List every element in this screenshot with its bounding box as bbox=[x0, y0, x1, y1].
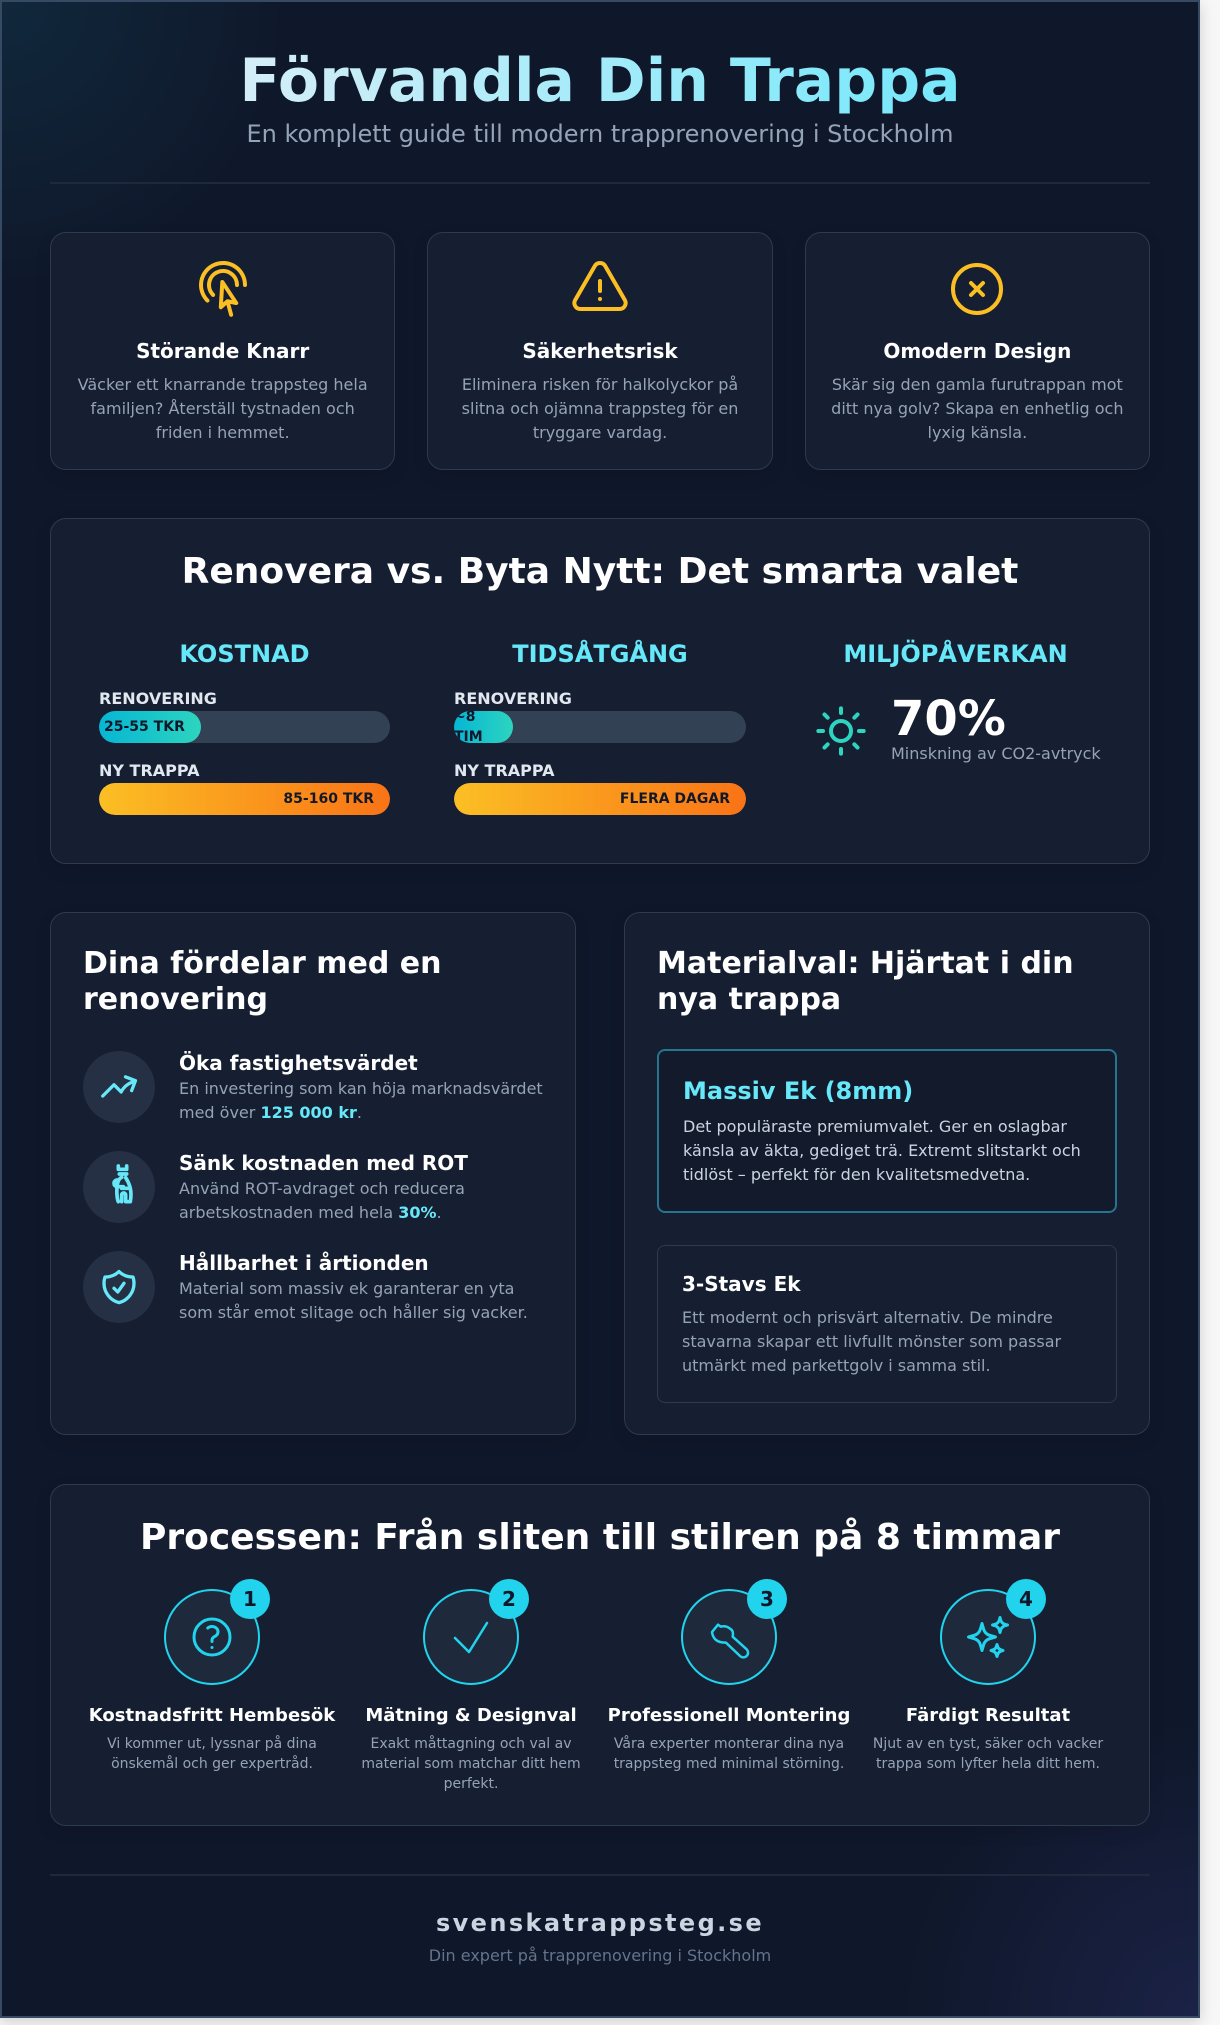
step heading: Färdigt Resultat bbox=[906, 1705, 1070, 1726]
material text: Det populäraste premiumvalet. Ger en oslagbar bbox=[683, 1117, 1067, 1136]
bar: renovation cost: 25-55 TKR bbox=[104, 719, 185, 735]
step text bbox=[107, 1735, 317, 1772]
heading: Dina fördelar med en bbox=[83, 946, 442, 981]
icon: rot deduction bbox=[83, 1151, 155, 1223]
benefit heading: Öka fastighetsvärdet bbox=[179, 1051, 418, 1075]
step text bbox=[361, 1735, 581, 1792]
heading: Omodern Design bbox=[883, 339, 1071, 363]
step text: Njut av en tyst, säker och vacker bbox=[873, 1736, 1103, 1752]
subtitle: En komplett guide till modern trapprenovering i Stockholm bbox=[246, 120, 954, 148]
benefit heading: Hållbarhet i årtionden bbox=[179, 1251, 429, 1275]
material text bbox=[682, 1308, 1062, 1375]
benefit text: En investering som kan höja marknadsvärdet bbox=[179, 1079, 543, 1098]
step number: 4 bbox=[1019, 1587, 1033, 1611]
step icon: question bbox=[164, 1589, 260, 1685]
icon: trending up bbox=[83, 1051, 155, 1123]
header bbox=[50, 46, 1150, 184]
bar: new stairs cost: 85-160 TKR bbox=[283, 791, 374, 807]
body text bbox=[831, 375, 1124, 442]
step 4 bbox=[873, 1579, 1104, 1772]
step number bbox=[747, 1579, 787, 1619]
label: NY TRAPPA bbox=[99, 760, 200, 780]
icon: sun bbox=[816, 706, 866, 756]
step number bbox=[230, 1579, 270, 1619]
footer bbox=[50, 1874, 1150, 1965]
step text: perfekt. bbox=[444, 1776, 498, 1792]
step 3 bbox=[608, 1579, 850, 1772]
material: massive oak bbox=[657, 1049, 1117, 1213]
body text: familjen? Återställ tystnaden och bbox=[91, 399, 355, 418]
bar: new stairs cost bbox=[99, 783, 390, 815]
label: RENOVERING bbox=[454, 688, 572, 708]
benefit text: som står emot slitage och håller sig vacker. bbox=[179, 1303, 528, 1322]
step number bbox=[1006, 1579, 1046, 1619]
body text: slitna och ojämna trappsteg för en bbox=[462, 399, 738, 418]
material text: Ett modernt och prisvärt alternativ. De mindre bbox=[682, 1308, 1053, 1327]
step heading: Kostnadsfritt Hembesök bbox=[89, 1705, 335, 1726]
step text bbox=[614, 1735, 844, 1772]
material text bbox=[683, 1117, 1081, 1184]
benefit text bbox=[179, 1079, 543, 1122]
benefit 1 bbox=[83, 1051, 543, 1123]
step text: Våra experter monterar dina nya bbox=[614, 1736, 844, 1752]
heading bbox=[83, 946, 442, 1017]
benefit text: Material som massiv ek garanterar en yta bbox=[179, 1279, 514, 1298]
step text: material som matchar ditt hem bbox=[361, 1756, 581, 1772]
benefit text bbox=[179, 1179, 465, 1222]
panel: process bbox=[50, 1484, 1150, 1826]
step text: trappsteg med minimal störning. bbox=[614, 1756, 844, 1772]
body text: Väcker ett knarrande trappsteg hela bbox=[78, 375, 368, 394]
heading: Materialval: Hjärtat i din bbox=[657, 946, 1074, 981]
benefit 3 bbox=[83, 1251, 528, 1323]
step text bbox=[873, 1736, 1104, 1772]
heading: renovering bbox=[83, 982, 268, 1017]
material text: stavarna skapar ett livfullt mönster som passar bbox=[682, 1332, 1061, 1351]
stat caption: Minskning av CO2-avtryck bbox=[891, 744, 1101, 763]
benefit text: med över 125 000 kr. bbox=[179, 1103, 362, 1122]
panel: comparison bbox=[50, 518, 1150, 864]
step number: 3 bbox=[760, 1587, 774, 1611]
step text: önskemål och ger expertråd. bbox=[111, 1756, 313, 1772]
step number: 2 bbox=[502, 1587, 516, 1611]
body text: friden i hemmet. bbox=[156, 423, 290, 442]
step text: Vi kommer ut, lyssnar på dina bbox=[107, 1736, 317, 1752]
material: three-strip oak bbox=[657, 1245, 1117, 1403]
material heading: 3-Stavs Ek bbox=[682, 1272, 801, 1296]
heading: Störande Knarr bbox=[136, 339, 309, 363]
column heading: TIDSÅTGÅNG bbox=[512, 640, 688, 668]
column heading: KOSTNAD bbox=[179, 640, 310, 668]
column: environment bbox=[816, 640, 1101, 763]
heading bbox=[657, 946, 1074, 1017]
icon: cursor ripple bbox=[199, 261, 247, 317]
bar: renovation cost bbox=[99, 711, 390, 743]
material text: tidlöst – perfekt för den kvalitetsmedvetna. bbox=[683, 1165, 1030, 1184]
heading: Säkerhetsrisk bbox=[522, 339, 678, 363]
panel: benefits bbox=[50, 912, 576, 1435]
heading: Renovera vs. Byta Nytt: Det smarta valet bbox=[182, 551, 1018, 592]
title: Förvandla Din Trappa bbox=[239, 46, 961, 116]
material heading: Massiv Ek (8mm) bbox=[683, 1077, 913, 1105]
step number bbox=[489, 1579, 529, 1619]
icon: x circle bbox=[951, 263, 1003, 315]
column: cost bbox=[99, 640, 390, 815]
panel: problem 3 bbox=[805, 232, 1150, 470]
bar: renovation time bbox=[454, 711, 746, 743]
label: RENOVERING bbox=[99, 688, 217, 708]
step number: 1 bbox=[243, 1587, 257, 1611]
body text: Skär sig den gamla furutrappan mot bbox=[832, 375, 1123, 394]
tagline: Din expert på trapprenovering i Stockholm bbox=[429, 1946, 771, 1965]
icon: shield check bbox=[83, 1251, 155, 1323]
benefit text: arbetskostnaden med hela 30%. bbox=[179, 1203, 442, 1222]
step 2 bbox=[361, 1579, 581, 1792]
step 1 bbox=[89, 1579, 336, 1772]
benefit text bbox=[179, 1279, 528, 1322]
benefit heading: Sänk kostnaden med ROT bbox=[179, 1151, 468, 1175]
column heading: MILJÖPÅVERKAN bbox=[843, 640, 1068, 668]
icon: warning triangle bbox=[572, 261, 628, 311]
column: time bbox=[454, 640, 746, 815]
stat value: 70% bbox=[891, 691, 1006, 747]
step icon: sparkles bbox=[940, 1589, 1036, 1685]
body text: ditt nya golv? Skapa en enhetlig och bbox=[831, 399, 1124, 418]
heading: Processen: Från sliten till stilren på 8 timmar bbox=[140, 1517, 1060, 1558]
body text: Eliminera risken för halkolyckor på bbox=[462, 375, 738, 394]
brand: svenskatrappsteg.se bbox=[436, 1909, 764, 1937]
body text bbox=[462, 375, 738, 442]
body text: tryggare vardag. bbox=[533, 423, 667, 442]
label: NY TRAPPA bbox=[454, 760, 555, 780]
benefit text: Använd ROT-avdraget och reducera bbox=[179, 1179, 465, 1198]
benefit 2 bbox=[83, 1151, 468, 1223]
panel: problem 2 bbox=[427, 232, 773, 470]
material text: utmärkt med parkettgolv i samma stil. bbox=[682, 1356, 991, 1375]
panel: problem 1 bbox=[50, 232, 395, 470]
step heading: Professionell Montering bbox=[608, 1705, 850, 1726]
heading: nya trappa bbox=[657, 982, 841, 1017]
bar: new stairs time bbox=[454, 783, 746, 815]
step icon: wrench bbox=[681, 1589, 777, 1685]
step heading: Mätning & Designval bbox=[365, 1705, 577, 1726]
step icon: check bbox=[423, 1589, 519, 1685]
step text: trappa som lyfter hela ditt hem. bbox=[876, 1756, 1100, 1772]
step text: Exakt måttagning och val av bbox=[370, 1736, 572, 1752]
bar: new stairs time: FLERA DAGAR bbox=[620, 791, 730, 807]
material text: känsla av äkta, gediget trä. Extremt slitstarkt och bbox=[683, 1141, 1081, 1160]
body text: lyxig känsla. bbox=[928, 423, 1027, 442]
panel: materials bbox=[624, 912, 1150, 1435]
body text bbox=[78, 375, 368, 442]
